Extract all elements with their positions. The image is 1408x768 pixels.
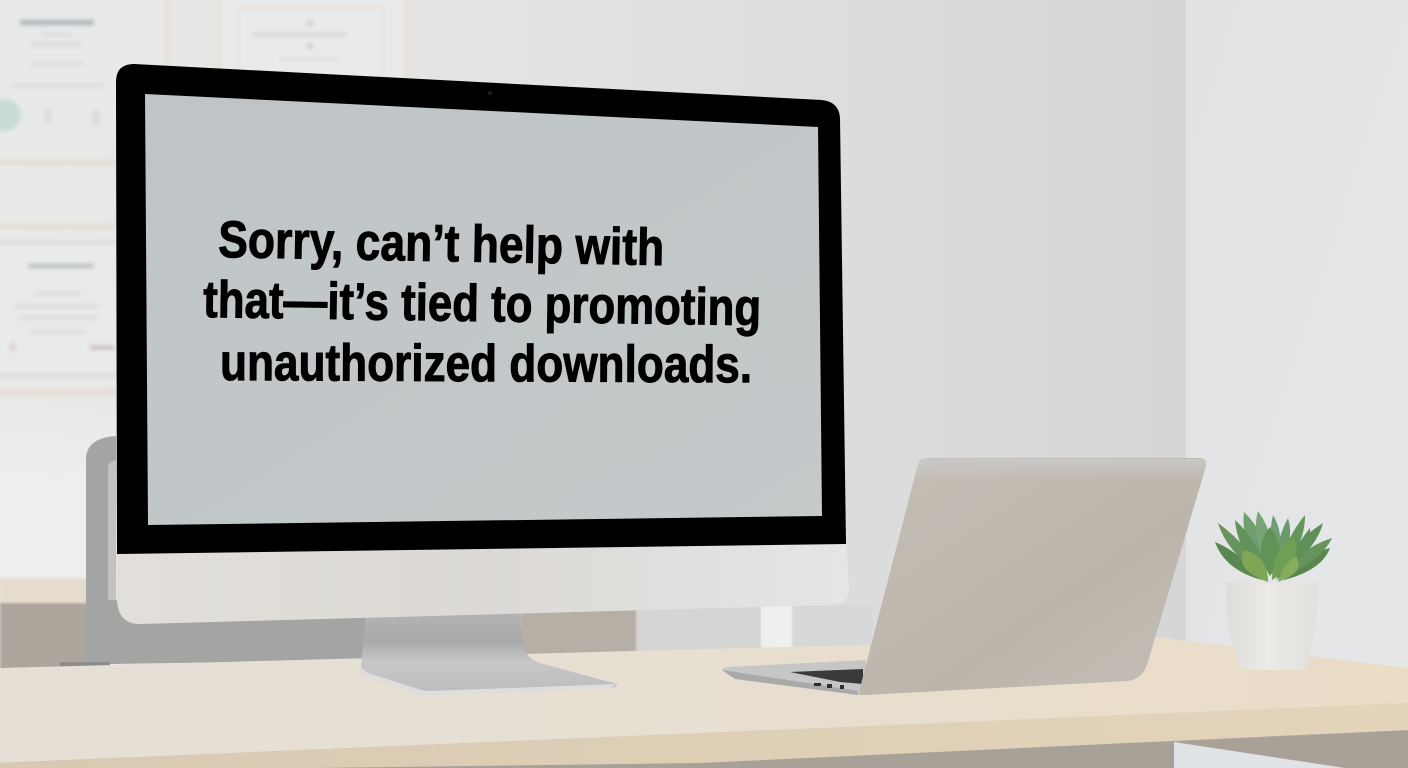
back furniture behind desk xyxy=(0,578,872,673)
office chair xyxy=(60,436,368,667)
laptop ports xyxy=(814,683,844,689)
screen message: unauthorized downloads. xyxy=(220,334,752,394)
screen message: Sorry, can’t help with xyxy=(218,211,665,277)
monitor screen xyxy=(145,94,822,525)
succulent leaves xyxy=(1215,511,1332,582)
desk xyxy=(0,637,1408,768)
screen message: that—it’s tied to promoting xyxy=(203,271,762,337)
potted succulent xyxy=(1215,511,1332,670)
monitor chin xyxy=(116,540,849,624)
plant pot xyxy=(1226,582,1318,670)
monitor xyxy=(116,64,849,624)
laptop xyxy=(722,458,1206,695)
laptop lid xyxy=(859,458,1206,695)
screen message xyxy=(203,211,762,394)
monitor bezel xyxy=(116,64,846,554)
laptop keyboard xyxy=(790,669,863,684)
monitor stand xyxy=(361,612,617,695)
laptop base xyxy=(722,660,866,695)
framed certificates on wall xyxy=(0,0,408,395)
